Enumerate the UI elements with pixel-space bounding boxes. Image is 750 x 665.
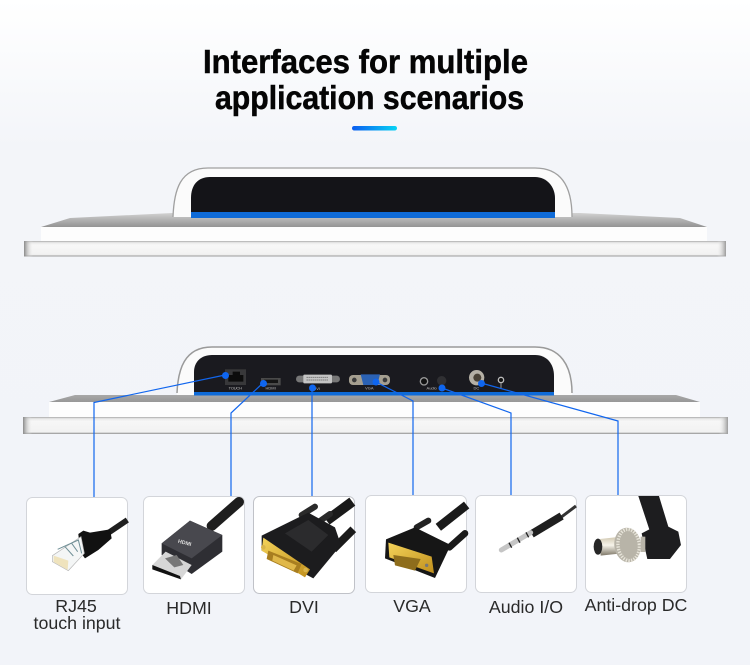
title (203, 44, 528, 117)
card labels (34, 595, 688, 633)
card labels: DVI (289, 597, 319, 617)
port panel: touch, HDMI, DVI, VGA: HDMI (266, 386, 276, 391)
card labels: RJ45 (55, 596, 97, 616)
card: HDMI (144, 496, 244, 594)
card labels: touch input (34, 613, 121, 633)
title: Interfaces for multiple (203, 44, 528, 81)
card labels: VGA (393, 596, 431, 616)
connector lines (94, 375, 618, 497)
port panel: audio, DC: DC (473, 386, 479, 391)
card labels: Anti-drop DC (585, 595, 688, 615)
card labels: HDMI (166, 598, 212, 618)
card: Anti-drop DC (586, 496, 686, 592)
port panel: touch, HDMI, DVI, VGA (225, 369, 390, 391)
monitor rear view: with ports (23, 347, 728, 434)
port panel: touch, HDMI, DVI, VGA: DVI (313, 386, 320, 391)
port panel: touch, HDMI, DVI, VGA: TOUCH (229, 386, 242, 391)
card: HDMI: HDMI (177, 539, 192, 548)
card: DVI (254, 496, 354, 594)
title accent bar (352, 126, 397, 130)
card: Audio (476, 496, 576, 592)
port panel: touch, HDMI, DVI, VGA: VGA (365, 386, 374, 391)
port panel: audio, DC (420, 370, 504, 391)
card labels: Audio I/O (489, 597, 563, 617)
connector dots (222, 372, 485, 392)
monitor top view: no port labels (24, 168, 726, 256)
card: VGA (366, 496, 467, 592)
card: RJ45 (26, 498, 128, 594)
port panel: audio, DC: Audio (427, 386, 438, 391)
title: application scenarios (215, 80, 524, 117)
